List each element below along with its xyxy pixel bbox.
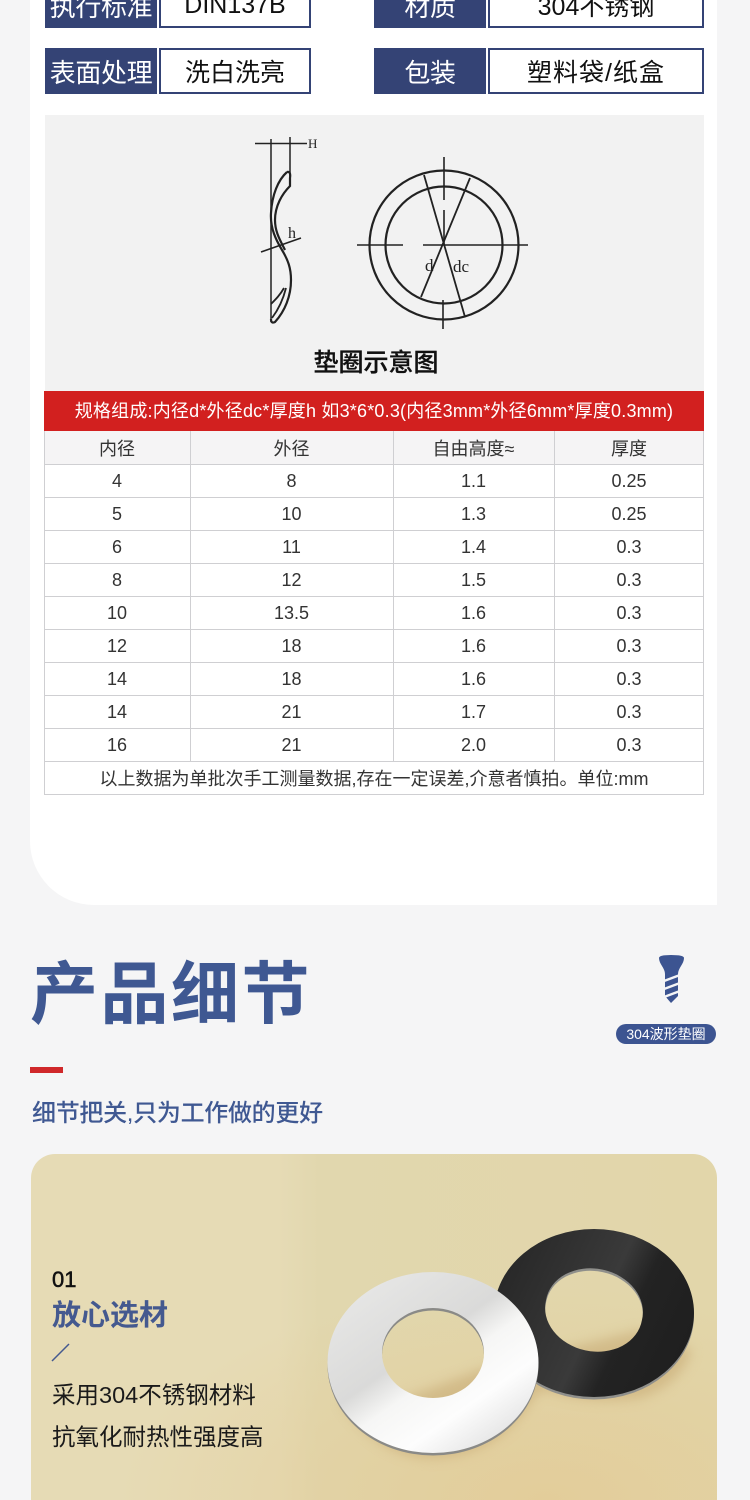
header row: 自由高度≈ — [433, 438, 514, 458]
card heading: 放心选材 — [52, 1300, 168, 1332]
diagram dimension labels: dc — [453, 257, 470, 276]
header row — [99, 438, 647, 458]
row: 21 — [281, 735, 302, 755]
card description: 采用304不锈钢材料 — [52, 1382, 256, 1408]
card description — [52, 1382, 264, 1450]
row: 0.25 — [611, 504, 647, 524]
washers photo illustration — [247, 1229, 717, 1500]
row: 18 — [281, 669, 302, 689]
red spec banner — [44, 391, 704, 431]
red spec banner: 规格组成:内径d*外径dc*厚度h 如3*6*0.3(内径3mm*外径6mm*厚度0.3mm) — [75, 401, 673, 421]
technical drawing of washer — [255, 136, 528, 329]
row — [107, 636, 642, 656]
diagram dimension labels: H — [308, 136, 317, 151]
red accent bar — [30, 1067, 63, 1073]
row: 0.3 — [616, 636, 642, 656]
table grid — [44, 431, 704, 795]
row — [107, 735, 642, 755]
row: 8 — [112, 570, 122, 590]
spec value: packaging — [488, 48, 704, 94]
table footnote: 以上数据为单批次手工测量数据,存在一定误差,介意者慎拍。单位:mm — [100, 768, 648, 788]
row: 21 — [281, 702, 302, 722]
row — [112, 570, 642, 590]
spec value: material — [488, 0, 704, 28]
row: 0.3 — [616, 537, 642, 557]
row: 0.3 — [616, 735, 642, 755]
row: 1.3 — [461, 504, 486, 524]
panel: washer diagram — [45, 115, 704, 391]
washer shadows — [340, 1330, 692, 1458]
icon: screw — [659, 955, 684, 1003]
row: 14 — [107, 669, 127, 689]
spec label: material — [374, 0, 486, 28]
row: 6 — [112, 537, 122, 557]
row: 1.5 — [461, 570, 486, 590]
row — [112, 504, 647, 524]
row: 12 — [107, 636, 127, 656]
row: 16 — [107, 735, 127, 755]
row: 1.6 — [461, 636, 486, 656]
row: 14 — [107, 702, 127, 722]
row: 12 — [281, 570, 302, 590]
black washer — [494, 1229, 694, 1400]
row: 0.25 — [611, 471, 647, 491]
row: 8 — [286, 471, 296, 491]
spec value: standard — [159, 0, 311, 28]
product tag pill — [616, 1024, 716, 1044]
diagram caption: 垫圈示意图 — [313, 349, 438, 377]
header row: 内径 — [99, 438, 135, 458]
row: 1.6 — [461, 669, 486, 689]
row: 5 — [112, 504, 122, 524]
row: 1.6 — [461, 603, 486, 623]
spec value: packaging: 塑料袋/纸盒 — [527, 59, 665, 87]
row: 13.5 — [274, 603, 309, 623]
card number: 01 — [52, 1267, 76, 1292]
side profile — [255, 137, 307, 323]
row: 10 — [281, 504, 302, 524]
row: 0.3 — [616, 603, 642, 623]
header row: 外径 — [274, 438, 310, 458]
spec value: surface treatment — [159, 48, 311, 94]
row — [112, 537, 642, 557]
diagram dimension labels: h — [288, 225, 296, 242]
section title: 产品细节 — [30, 957, 312, 1033]
product tag pill: 304波形垫圈 — [626, 1026, 706, 1042]
row — [112, 471, 647, 491]
row: 11 — [282, 537, 301, 557]
spec label: packaging — [374, 48, 486, 94]
row: 4 — [112, 471, 122, 491]
row — [107, 669, 642, 689]
row: 1.4 — [461, 537, 486, 557]
row — [107, 702, 642, 722]
card description: 抗氧化耐热性强度高 — [52, 1424, 264, 1450]
slash accent — [52, 1344, 70, 1362]
row: 0.3 — [616, 570, 642, 590]
section subtitle: 细节把关,只为工作做的更好 — [32, 1100, 323, 1127]
diagram dimension labels — [288, 136, 470, 276]
header row: 厚度 — [611, 438, 647, 458]
spec label: packaging: 包装 — [404, 58, 456, 88]
row: 2.0 — [461, 735, 486, 755]
panel: specifications — [30, 0, 717, 905]
row: 1.1 — [461, 471, 486, 491]
row — [107, 603, 642, 623]
spec label: surface treatment — [45, 48, 157, 94]
silver washer — [328, 1272, 538, 1456]
row: 10 — [107, 603, 127, 623]
row: 18 — [281, 636, 302, 656]
row: 0.3 — [616, 669, 642, 689]
row: 1.7 — [461, 702, 486, 722]
row: 0.3 — [616, 702, 642, 722]
face view — [357, 157, 528, 329]
panel: detail card — [31, 1154, 717, 1500]
spec value: surface treatment: 洗白洗亮 — [185, 59, 285, 87]
specification table — [44, 431, 704, 795]
diagram dimension labels: d — [425, 256, 434, 275]
spec label: surface treatment: 表面处理 — [50, 58, 152, 88]
